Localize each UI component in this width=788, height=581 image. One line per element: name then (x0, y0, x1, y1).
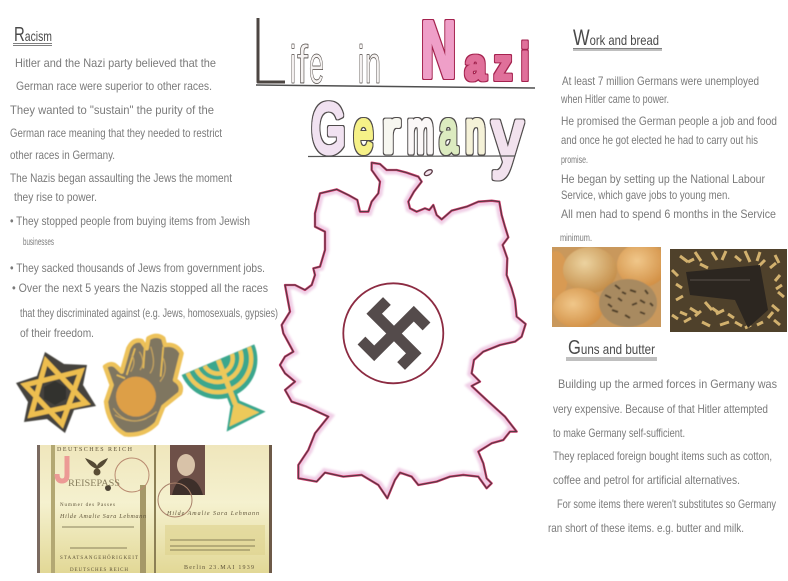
passport text: REISEPASS (68, 479, 120, 489)
text block: racism: German race meaning that they needed to restrict (10, 126, 223, 140)
title line: life in: i (358, 35, 364, 95)
heading: guns and butter: Guns and butter (568, 337, 655, 359)
emblem: circle with swastika (343, 283, 443, 383)
title line: life in: f (297, 35, 309, 95)
text block: racism: that they discriminated against (e.g. Jews, homosexuals, gypsies) (20, 306, 278, 320)
text block: racism: The Nazis began assaulting the Jews the moment (10, 171, 233, 185)
title: life in nazi germany (256, 5, 535, 179)
text block: work and bread: promise. (561, 155, 588, 166)
panel: racism (10, 24, 278, 340)
passport text: DEUTSCHES REICH (57, 447, 133, 453)
text block: racism: businesses (23, 237, 54, 248)
text block: racism: German race were superior to other races. (16, 79, 212, 93)
text block: guns and butter: ran short of these items. e.g. butter and milk. (548, 521, 744, 535)
text block: work and bread: Service, which gave jobs to young men. (561, 188, 730, 202)
title line: life in (258, 18, 381, 95)
image: bread rolls (552, 247, 661, 327)
passport text: Hilde Amalie Sara Lehmann (166, 511, 259, 517)
title word: nazi (421, 5, 529, 94)
text block: guns and butter (548, 377, 777, 535)
title word: germany: r (382, 100, 400, 165)
passport text: Nummer des Passes (60, 503, 115, 508)
text block: work and bread: when Hitler came to power. (560, 92, 669, 106)
image: passport document (37, 445, 272, 573)
text block: racism: they rise to power. (14, 190, 97, 204)
icon: hamsa hand (105, 336, 182, 435)
red J stamp (57, 456, 67, 481)
title word: nazi: N (421, 5, 456, 94)
text block: racism (10, 56, 278, 340)
title word: germany: y (492, 94, 522, 179)
text block: work and bread: He began by setting up the National Labour (561, 172, 765, 186)
title word: germany: m (408, 100, 434, 165)
text block: racism: • They sacked thousands of Jews from government jobs. (10, 261, 265, 275)
title word: germany: G (312, 90, 346, 168)
panel: work and bread (544, 25, 787, 535)
passport text: DEUTSCHES REICH (70, 568, 128, 573)
title word: germany (312, 90, 522, 179)
title word: nazi: a (465, 40, 486, 90)
title line: life in: i (290, 35, 296, 95)
passport text: Hilde Amalie Sara Lehmann (59, 514, 146, 520)
eagle emblem (85, 458, 108, 469)
text block: work and bread (560, 74, 777, 244)
passport text: Berlin 23.MAI 1939 (184, 565, 254, 571)
text block: racism: • Over the next 5 years the Nazis stopped all the races (12, 281, 268, 295)
icon: star of david (16, 352, 96, 433)
text block: racism: • They stopped people from buying items from Jewish (10, 214, 250, 228)
text block: guns and butter: to make Germany self-sufficient. (553, 426, 685, 440)
text block: racism: They wanted to "sustain" the purity of the (10, 103, 214, 117)
passport text (57, 447, 259, 573)
title word: germany: a (440, 100, 458, 165)
map: germany outline (280, 163, 526, 498)
title word: nazi: z (494, 40, 512, 90)
title word: germany: e (354, 100, 373, 165)
portrait photograph (170, 445, 205, 495)
text block: racism: other races in Germany. (10, 148, 115, 162)
title word: germany: n (466, 100, 486, 165)
icon: menorah (182, 344, 266, 432)
text block: racism: of their freedom. (20, 326, 94, 340)
text block: guns and butter: coffee and petrol for artificial alternatives. (553, 473, 740, 487)
heading: racism: Racism (14, 24, 52, 46)
text block: work and bread: minimum. (560, 233, 592, 244)
passport text: STAATSANGEHÖRIGKEIT (60, 555, 138, 561)
heading: work and bread: Work and bread (573, 25, 659, 50)
title line: life in: n (365, 35, 381, 95)
title line: life in: e (309, 35, 324, 95)
text block: racism: Hitler and the Nazi party believed that the (15, 56, 216, 70)
image: pistol and bullets (670, 249, 787, 332)
title word: nazi: i (521, 34, 529, 92)
